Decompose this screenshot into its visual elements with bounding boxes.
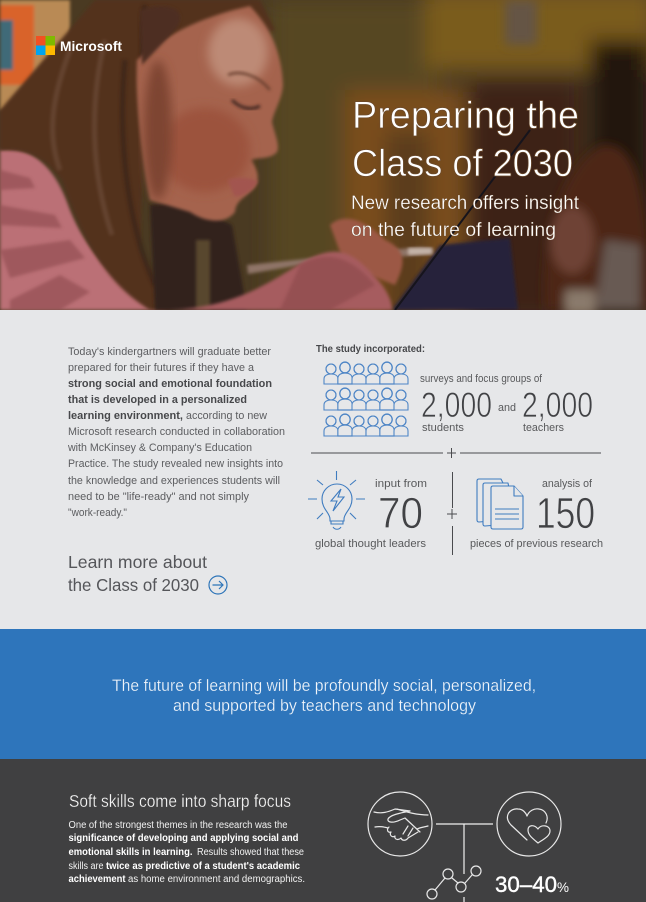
icon: line chart	[427, 866, 481, 899]
soft skills text: One of the strongest themes in the research was the	[68, 820, 288, 831]
panel: study overview	[0, 310, 646, 629]
sweater	[0, 149, 170, 310]
panel: blue banner: The future of learning will be profoundly social, personalized,	[112, 677, 536, 695]
stat: thought leaders: 70	[378, 489, 423, 538]
intro text block: that is developed in a personalized	[68, 394, 247, 406]
intro text block: with McKinsey & Company's Education	[67, 442, 252, 454]
icon: hearts	[497, 792, 561, 856]
intro text block: "work-ready."	[68, 507, 127, 519]
stat: surveys and focus groups	[420, 373, 593, 434]
hair	[0, 0, 275, 310]
stat: surveys and focus groups: teachers	[523, 422, 564, 434]
learn more link: Learn more about	[68, 552, 207, 572]
title	[352, 95, 579, 185]
stat: 30-40 percent: %	[557, 879, 569, 895]
logo	[36, 36, 122, 55]
stat: surveys and focus groups: 2,000	[522, 386, 593, 425]
wall art behind girl	[0, 0, 70, 110]
soft skills text	[68, 820, 305, 885]
dark hair beneath chin	[150, 200, 247, 310]
soft skills text: achievement	[68, 874, 126, 885]
soft skills text: Results showed that these	[197, 847, 304, 858]
stat: previous research: 150	[536, 489, 595, 538]
stat: thought leaders: global thought leaders	[315, 538, 427, 550]
tablet	[392, 238, 518, 310]
stat: surveys and focus groups: students	[422, 422, 464, 434]
hand	[330, 219, 403, 285]
intro text block: learning environment,	[68, 410, 183, 422]
title: Preparing the	[352, 95, 579, 137]
soft skills text: twice as predictive of a student's academic	[106, 861, 300, 872]
intro text block: according to new	[186, 410, 267, 422]
intro text block: strong social and emotional foundation	[68, 378, 272, 390]
stat: surveys and focus groups: 2,000	[421, 386, 492, 425]
stat: previous research	[470, 478, 603, 550]
subtitle: New research offers insight	[351, 192, 580, 214]
subtitle: on the future of learning	[351, 219, 556, 241]
stat: 30-40 percent: 30–40	[495, 872, 557, 897]
stat: previous research: analysis of	[542, 478, 593, 490]
stat: thought leaders: input from	[375, 478, 427, 490]
sleeve	[160, 252, 392, 310]
learn more link	[68, 552, 227, 595]
intro text block: prepared for their futures if they have a	[68, 362, 255, 374]
intro text block: Microsoft research conducted in collaboration	[68, 426, 285, 438]
icon: lightbulb	[308, 471, 365, 529]
panel: hero photo	[0, 0, 646, 320]
soft skills text: emotional skills in learning.	[68, 847, 193, 858]
soft skills text: significance of developing and applying social and	[68, 833, 298, 844]
stat: previous research: pieces of previous research	[470, 538, 603, 550]
intro text block: Practice. The study revealed new insights into	[68, 458, 283, 470]
icon: arrow circle	[209, 576, 227, 594]
stat: thought leaders	[315, 478, 427, 550]
study heading: The study incorporated:	[316, 343, 425, 355]
intro text block: the knowledge and experiences students will	[68, 475, 280, 487]
panel: soft skills	[0, 759, 646, 902]
logo: Microsoft	[60, 38, 122, 54]
soft skills heading: Soft skills come into sharp focus	[69, 791, 291, 811]
subtitle	[351, 192, 580, 241]
intro text block: need to be "life-ready" and not simply	[68, 491, 249, 503]
icon: people	[324, 362, 408, 436]
panel: blue banner: and supported by teachers and technology	[173, 697, 477, 715]
soft skills text: as home environment and demographics.	[128, 874, 305, 885]
stat: surveys and focus groups: and	[498, 402, 516, 414]
intro text block: Today's kindergartners will graduate better	[68, 346, 271, 358]
connector lines	[436, 824, 493, 902]
intro text block	[67, 346, 285, 519]
soft skills text: skills are	[68, 861, 104, 872]
face	[137, 6, 283, 221]
learn more link: the Class of 2030	[68, 575, 199, 595]
panel: blue banner	[0, 629, 646, 759]
title: Class of 2030	[352, 143, 573, 185]
pen	[247, 247, 433, 274]
stat: surveys and focus groups: surveys and focus groups of	[420, 373, 543, 385]
icon: documents	[477, 479, 523, 529]
icon: handshake	[368, 792, 432, 856]
